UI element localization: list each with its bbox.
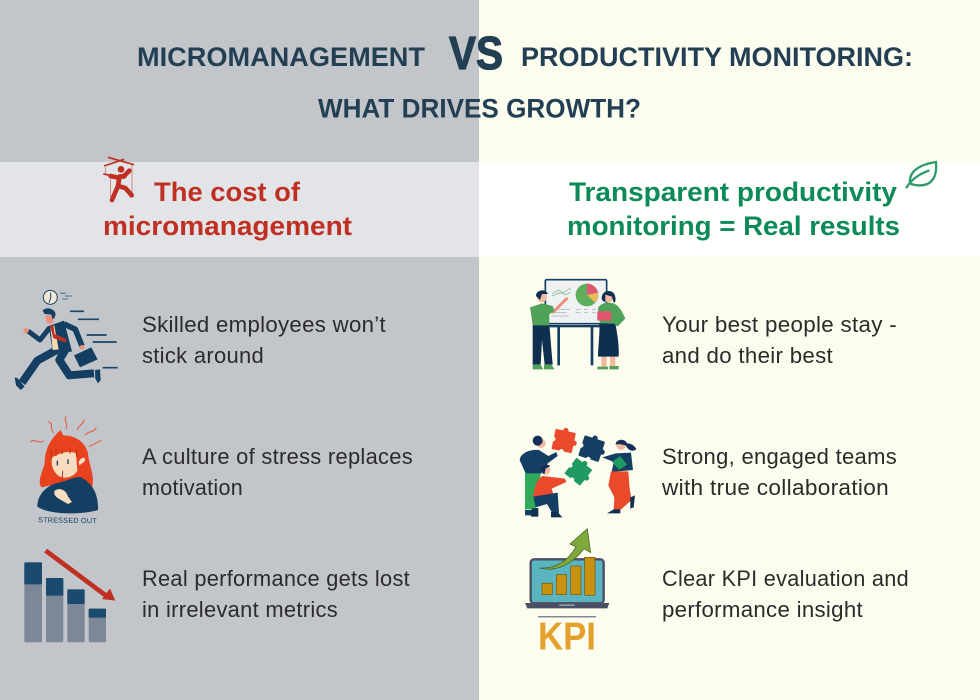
title (137, 27, 913, 124)
panel: right heading band (479, 162, 980, 257)
icon: team with puzzle pieces (520, 425, 636, 517)
text: skilled employees (142, 312, 386, 368)
icon: leaf (907, 162, 936, 187)
title: MICROMANAGEMENT (137, 42, 425, 72)
icon: puppet on strings (103, 157, 134, 200)
text: best people stay: Your best people stay - (662, 312, 897, 337)
icon: declining bar chart (24, 551, 115, 642)
text: best people stay (662, 312, 897, 368)
text: culture of stress (142, 444, 413, 500)
text: skilled employees: stick around (142, 343, 264, 368)
title: VS (449, 27, 503, 79)
text: clear KPI evaluation: performance insight (662, 597, 863, 622)
text: culture of stress: motivation (142, 475, 243, 500)
text: clear KPI evaluation (662, 566, 909, 622)
text: clear KPI evaluation: Clear KPI evaluation and (662, 566, 909, 591)
heading: transparent productivity monitoring: monitoring = Real results (567, 211, 900, 241)
text: strong engaged teams: Strong, engaged teams (662, 444, 897, 469)
text: strong engaged teams (661, 444, 897, 500)
title: PRODUCTIVITY MONITORING: (521, 42, 913, 72)
text: real performance (142, 566, 410, 622)
panel: left heading band (0, 162, 479, 257)
heading: cost of micromanagement: micromanagement (103, 211, 352, 241)
text: best people stay: and do their best (662, 343, 833, 368)
panel: left background (0, 0, 479, 700)
icon: presentation at whiteboard (530, 280, 625, 369)
icon: stressed woman (31, 417, 101, 525)
icon: KPI laptop: KPI (538, 615, 596, 659)
heading: cost of micromanagement: The cost of (154, 177, 301, 207)
heading: transparent productivity monitoring: Transparent productivity (569, 177, 897, 207)
text: skilled employees: Skilled employees won’t (142, 312, 386, 337)
text: strong engaged teams: with true collaboration (661, 475, 889, 500)
heading: cost of micromanagement (103, 177, 352, 241)
title: WHAT DRIVES GROWTH? (318, 94, 641, 124)
icon: stressed woman: STRESSED OUT (38, 515, 97, 525)
icon: KPI laptop (525, 529, 609, 659)
text: real performance: in irrelevant metrics (142, 597, 338, 622)
text: real performance: Real performance gets lost (142, 566, 410, 591)
heading: transparent productivity monitoring (567, 177, 900, 241)
panel: right background (479, 0, 980, 700)
text: culture of stress: A culture of stress replaces (142, 444, 413, 469)
icon: running businessman (15, 290, 118, 390)
